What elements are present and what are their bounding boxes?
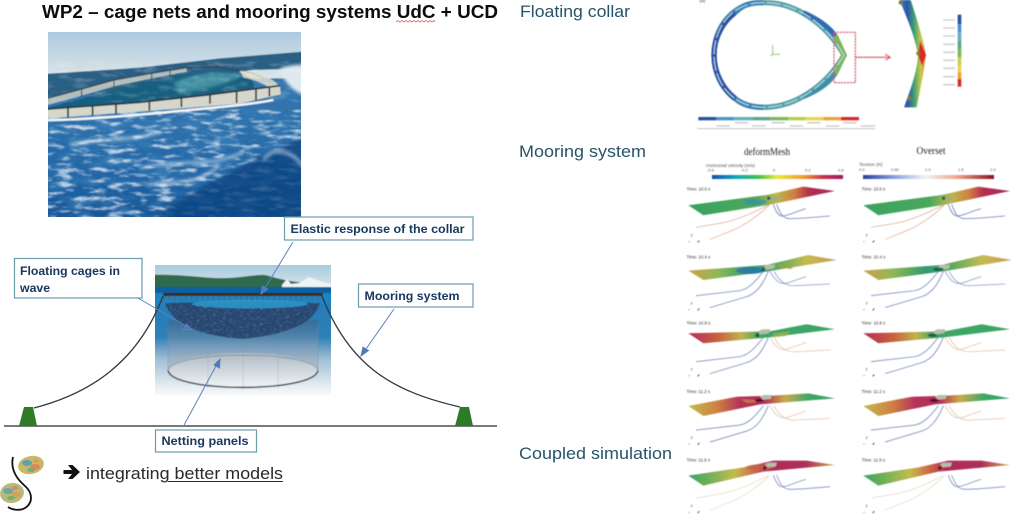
legend: tension colour bar: 0.0 — [859, 167, 865, 172]
icon: right arrow — [64, 465, 80, 479]
column title: deformMesh: deformMesh — [744, 147, 791, 158]
detail of collar tip — [899, 0, 926, 107]
fish school — [164, 300, 320, 340]
callout: floating cages in wave: wave — [19, 281, 50, 295]
panel: deformMesh t=11.6: Time: 11.6 s — [687, 457, 710, 462]
panel: Overset t=11.2: Time: 11.2 s — [862, 389, 885, 394]
legend: velocity colour bar: Horizontal velocity (m/s) — [706, 163, 755, 168]
horizontal colour bar — [697, 117, 875, 129]
legend: velocity colour bar: -0.6 — [707, 168, 715, 172]
heading: coupled simulation: Coupled simulation — [519, 445, 672, 463]
legend: tension colour bar: Tension (N) — [859, 162, 883, 167]
hills and shore — [155, 274, 300, 288]
icon: project logo — [0, 453, 46, 510]
legend: velocity colour bar: 0 — [773, 168, 776, 172]
callout: elastic response of the collar — [284, 217, 473, 240]
arrow: elastic response — [261, 242, 293, 294]
heading: floating collar: Floating collar — [520, 3, 631, 21]
callout: mooring system — [358, 284, 473, 307]
vertical colour bar — [943, 15, 961, 87]
callout: netting panels: Netting panels — [162, 434, 249, 448]
net cylinder — [168, 320, 318, 390]
panel: deformMesh t=10.0 — [687, 187, 835, 242]
panel: Overset t=10.8 — [862, 321, 1010, 376]
callout: floating cages in wave — [14, 258, 142, 298]
arrow: zoom to detail — [855, 54, 890, 60]
diagram: seabed line — [4, 425, 497, 427]
panel: Overset t=10.0 — [862, 187, 1010, 242]
legend: tension colour bar: 2.0 — [990, 167, 996, 172]
legend: tension colour bar — [859, 162, 996, 179]
chart: mooring simulation, deformMesh and Overset columns — [687, 146, 1012, 513]
legend: tension colour bar: 1.5 — [958, 167, 964, 172]
callout: netting panels — [156, 430, 256, 452]
panel: Overset t=10.0: Time: 10.0 s — [862, 187, 885, 192]
panel: deformMesh t=11.6 — [687, 457, 835, 513]
anchor: right — [455, 407, 473, 426]
panel: deformMesh t=10.0: Time: 10.0 s — [687, 187, 710, 192]
legend: tension colour bar: 1.0 — [925, 167, 931, 172]
panel: Overset t=10.8: Time: 10.8 s — [862, 321, 885, 326]
legend: velocity colour bar: 0.6 — [838, 168, 844, 172]
collar ring — [714, 3, 844, 107]
collar rail — [163, 293, 323, 298]
panel: deformMesh t=10.8 — [687, 321, 835, 376]
mooring line: left — [34, 296, 163, 408]
title: WP2 – cage nets and mooring systems UdC + UCD — [42, 2, 498, 22]
panel: Overset t=11.6 — [862, 457, 1010, 513]
legend: tension colour bar: 0.50 — [891, 167, 900, 172]
panel: deformMesh t=10.4: Time: 10.4 s — [687, 255, 710, 260]
arrow: mooring system — [361, 309, 394, 356]
chart: floating collar stress contour — [697, 0, 961, 129]
text: integrating better models: integrating better models — [86, 464, 283, 483]
panel: deformMesh t=10.4 — [687, 255, 837, 310]
panel: Overset t=10.4 — [862, 255, 1012, 310]
panel: deformMesh t=10.8: Time: 10.8 s — [687, 321, 710, 326]
legend: velocity colour bar — [706, 163, 844, 179]
anchor: left — [19, 407, 37, 426]
panel: deformMesh t=11.2: Time: 11.2 s — [687, 389, 710, 394]
legend: velocity colour bar: -0.2 — [741, 168, 749, 172]
arrow: floating cages — [138, 298, 192, 330]
panel: Overset t=11.6: Time: 11.6 s — [862, 457, 885, 462]
callout: mooring system: Mooring system — [364, 289, 460, 303]
panel: Overset t=11.2 — [862, 389, 1010, 445]
diagram: net cage image — [155, 265, 331, 395]
mooring line: right — [322, 296, 460, 407]
photo: floating cage in rough sea — [48, 32, 301, 217]
callout: elastic response of the collar: Elastic response of the collar — [290, 222, 465, 236]
arrow: netting panels — [183, 359, 220, 427]
legend: velocity colour bar: 0.2 — [805, 168, 811, 172]
callout: floating cages in wave: Floating cages in — [20, 264, 120, 278]
panel: Overset t=10.4: Time: 10.4 s — [862, 255, 885, 260]
column title: Overset: Overset — [916, 146, 946, 157]
heading: mooring system: Mooring system — [519, 143, 646, 161]
panel: deformMesh t=11.2 — [687, 389, 835, 445]
